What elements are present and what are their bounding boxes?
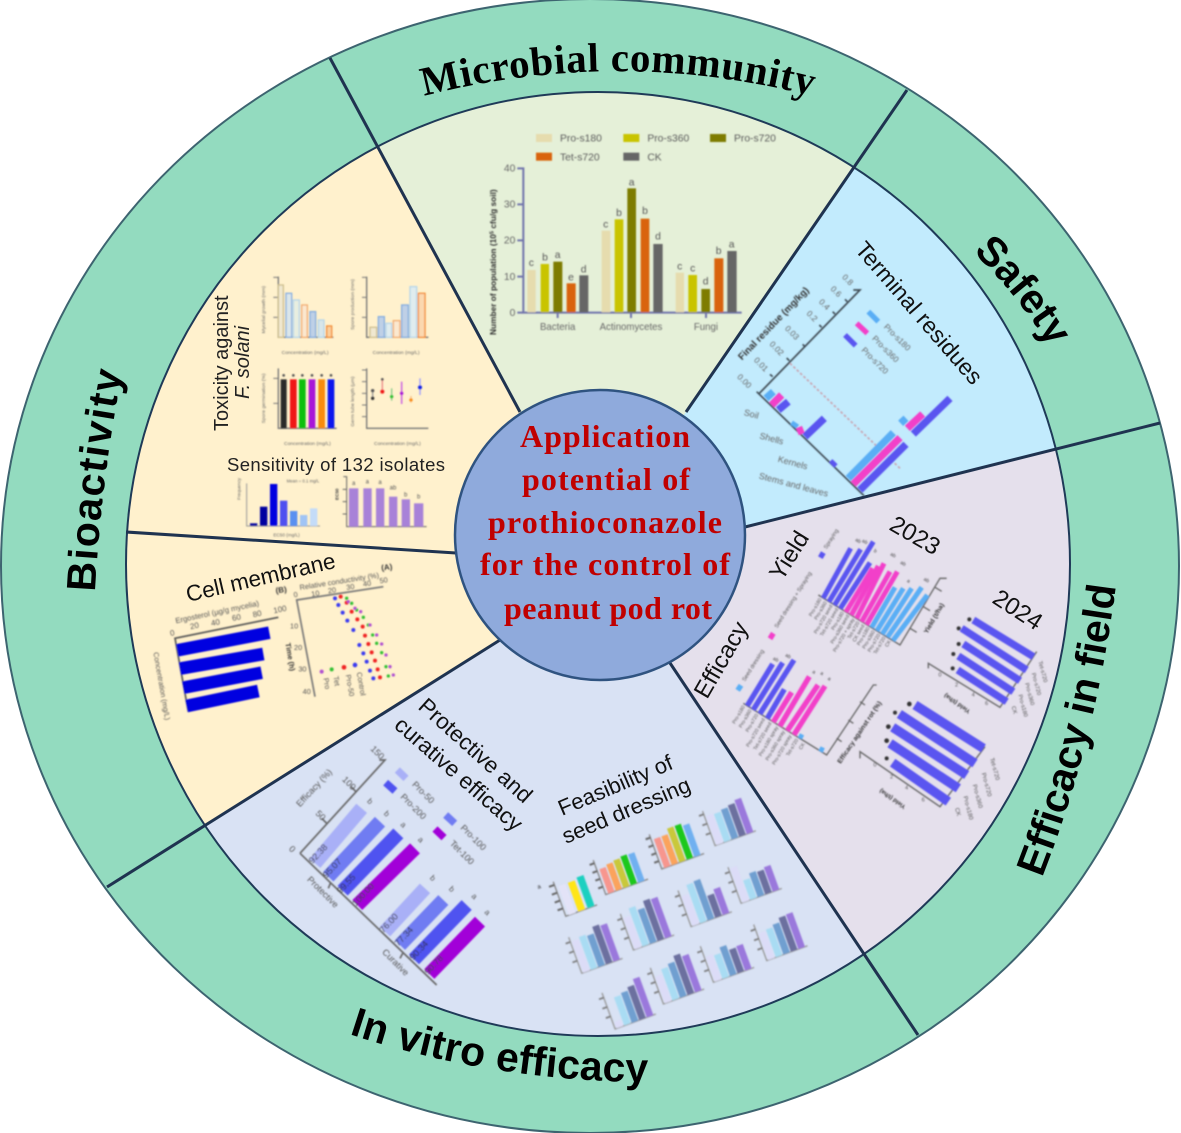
bar chart: yield 2024: 0: [938, 673, 941, 679]
mini chart 1: [537, 868, 597, 922]
bar chart: mycelial growth: [261, 277, 333, 356]
heading: In vitro efficacy: In vitro efficacy: [352, 1008, 648, 1090]
charts: seed dressing small multiples: [537, 796, 807, 1031]
bar chart: protective and curative efficacy: b: [428, 873, 438, 883]
bar chart: protective and curative efficacy: 90.78: [422, 953, 445, 976]
center title: [480, 418, 730, 626]
bar chart: terminal residues: 0.4: [817, 297, 832, 312]
bar chart: protective and curative efficacy: 0: [287, 844, 298, 854]
bar chart: protective and curative efficacy: 150: [369, 744, 386, 761]
legend: seed and spray treatments: Seed dressing: [742, 649, 766, 683]
bar chart: yield 2023: Pro-s360 seed: [830, 614, 851, 645]
bar chart: efficacy 2024: Yield (t/ha): [879, 787, 907, 809]
bar chart: yield 2024: [928, 617, 1048, 718]
bar chart: ergosterol: 20: [189, 621, 200, 631]
bar chart: protective and curative efficacy: 100: [340, 774, 358, 792]
bars: light blue series: [766, 392, 906, 478]
mini chart 9: [696, 931, 754, 984]
bar chart: protective and curative efficacy: Curative: [380, 947, 411, 978]
text: Feasibility of seed dressing: Feasibility of: [554, 749, 677, 821]
bar chart: protective and curative efficacy: Tet-100: [448, 838, 476, 867]
bar chart: yield 2023: a: [906, 578, 911, 585]
bar chart: efficacy 2024: Tet-s720: [988, 757, 1000, 782]
center title: potential of: [522, 461, 690, 497]
bar chart: microbial population: Number of population (10: [488, 234, 498, 335]
bar chart: microbial population: b: [642, 206, 648, 217]
bar chart: yield 2023: b: [872, 548, 878, 555]
bar chart: efficacy 2024: Pro-s180: [961, 796, 974, 821]
bar chart: isolate means: [334, 477, 427, 527]
bar chart: yield 2023: Pro-s360: [861, 629, 877, 650]
bar chart: microbial population: c: [603, 219, 608, 230]
bar chart: ergosterol: 100: [273, 604, 288, 615]
bar chart: terminal residues: Stems and leaves: [758, 471, 830, 499]
bar chart: yield 2023: Tet-s720: [847, 620, 862, 640]
bar chart: protective and curative efficacy: a: [483, 908, 492, 918]
bar chart: microbial population: 10: [504, 272, 516, 283]
scatter chart: relative conductivity: Pro-50: [344, 674, 356, 697]
chart legend: Pro-s180: [560, 133, 602, 144]
bar chart: terminal residues: 0.03: [783, 323, 802, 342]
heading: Efficacy in field: Efficacy in field: [1016, 584, 1116, 876]
bar chart: protective and curative efficacy: b: [447, 884, 457, 894]
bar chart: isolate distribution: Mean = 0.1 mg/L: [287, 479, 320, 484]
mini chart 12: [596, 976, 656, 1031]
center circle: [455, 390, 745, 680]
bar chart: ergosterol: 80: [252, 609, 263, 619]
mini chart 7: [614, 895, 674, 952]
bar chart: microbial population: cfu/g soil): [488, 189, 498, 231]
bar chart: microbial population: d: [581, 265, 587, 276]
scatter chart: relative conductivity: Pro: [321, 677, 332, 690]
bar chart: spore production: [350, 277, 428, 356]
panel: microbial community sector: [377, 92, 853, 535]
bar chart: yield 2023: ab: [889, 552, 897, 560]
scatter chart: relative conductivity: 30: [298, 665, 306, 674]
heading: Bioactivity: Bioactivity: [66, 368, 128, 590]
bar chart: efficacy 2024: 6: [922, 798, 925, 804]
text: Cell membrane: Cell membrane: [184, 548, 338, 607]
bar chart: protective and curative efficacy: a: [416, 835, 426, 845]
bar chart: protective and curative efficacy: Pro-200: [399, 792, 428, 821]
bar chart: yield 2023: ab: [922, 577, 930, 585]
bar chart: microbial population: d: [655, 231, 661, 242]
bar chart: microbial population: Bacteria: [540, 322, 576, 333]
bar chart: isolate means: b: [404, 493, 408, 499]
bar chart: spore germination: Spore germination (%): [261, 373, 267, 423]
bar chart: yield 2024: 6: [985, 701, 988, 707]
mini chart 3: [645, 819, 704, 871]
scatter chart: germ tube length: [350, 368, 428, 447]
bar chart: efficacy 2023: Efficacy against rot (%): [837, 700, 883, 765]
bar chart: isolate distribution: [237, 477, 320, 538]
bar chart: microbial population: a: [555, 250, 561, 261]
bar chart: yield 2023: Pro-s180: [830, 611, 846, 632]
mini chart 1: a: [537, 884, 543, 891]
bar chart: efficacy 2023: Tet-s720 seed: [753, 721, 774, 751]
chart legend: [536, 133, 776, 164]
bar chart: yield 2023: Pro-s180: [808, 597, 824, 618]
bar chart: efficacy 2023: Tet-s720: [785, 738, 800, 758]
bar chart: yield 2024: CK: [1010, 706, 1018, 715]
bar chart: efficacy 2023: Pro-s360 spray: [765, 729, 787, 762]
text: Terminal residues: Terminal residues: [850, 236, 988, 389]
scatter chart: relative conductivity: Time (h): [283, 642, 297, 672]
bar chart: efficacy 2023: Pro-s720 spray: [771, 734, 794, 766]
bar chart: yield 2023: Yield (t/ha): [923, 602, 946, 635]
mini chart 6: [672, 873, 732, 928]
bars: blue series: [778, 398, 950, 490]
chart legend: Pro-s720: [734, 133, 776, 144]
bar chart: yield 2024: Pro-s720: [1030, 672, 1041, 696]
scatter chart: relative conductivity: (A): [381, 562, 393, 573]
bar chart: spore germination: Concentration (mg/L): [284, 441, 331, 447]
scatter chart: relative conductivity: Control: [355, 671, 368, 697]
scatter chart: relative conductivity: 10: [311, 588, 320, 599]
bar chart: ergosterol: Concentration (mg/L): [151, 651, 172, 721]
text: Efficacy: Efficacy: [689, 617, 754, 703]
scatter chart: relative conductivity: Tet: [331, 675, 342, 687]
panel: safety sector: [600, 168, 1056, 535]
bar chart: yield 2023: Pro-s360: [813, 600, 829, 621]
bar chart: efficacy 2023: Pro-s180 spray: [758, 725, 780, 758]
text: Toxicity against F. solani: F. solani: [232, 325, 254, 399]
bar chart: protective and curative efficacy: 77.34: [392, 925, 415, 948]
bar chart: yield 2023: [808, 537, 947, 656]
mini chart 2: [589, 845, 648, 896]
mini chart 10: [749, 910, 807, 962]
bar chart: microbial population: c: [677, 261, 682, 272]
bar chart: yield 2024: 4: [972, 693, 975, 699]
bar chart: terminal residues: Kernels: [777, 454, 809, 472]
mini chart 8: [563, 921, 622, 975]
scatter chart: relative conductivity: 0: [293, 590, 298, 599]
bar chart: isolate means: a: [366, 479, 370, 485]
bar chart: protective and curative efficacy: a: [470, 892, 479, 902]
text: Toxicity against F. solani: Toxicity against: [211, 295, 233, 431]
legend: seed and spray treatments: Seed dressing + Spraying: [774, 571, 813, 629]
bar chart: efficacy 2024: 2: [890, 774, 893, 780]
bar chart: ergosterol: [151, 599, 288, 721]
scatter chart: relative conductivity: Relative conductivity (%): [299, 571, 380, 592]
bar chart: microbial population: 30: [504, 200, 516, 211]
chart legend: CK: [647, 153, 662, 164]
chart legend: [845, 312, 878, 346]
center title: Application: [520, 418, 690, 454]
scatter chart: germ tube length: Concentration (mg/L): [374, 441, 421, 447]
bar chart: efficacy 2024: CK: [953, 807, 961, 817]
charts: field yield and efficacy: [731, 528, 1048, 821]
bar chart: yield 2024: Pro-s180: [1016, 694, 1028, 718]
bar chart: efficacy 2023: a: [819, 671, 825, 677]
bar chart: yield 2023: Tet-s720 seed: [819, 607, 840, 637]
bar chart: efficacy 2024: Pro-s360: [971, 784, 983, 810]
bar chart: protective and curative efficacy: Pro-100: [459, 823, 488, 852]
bar chart: protective and curative efficacy: a: [399, 820, 408, 830]
bar chart: yield 2024: Tet-s720: [1036, 661, 1048, 683]
bar chart: terminal residues: 0.02: [768, 339, 786, 358]
bar chart: efficacy 2023: a: [826, 676, 832, 683]
bar chart: efficacy 2023: [731, 653, 883, 766]
scatter chart: relative conductivity: 30: [346, 582, 355, 592]
bar chart: protective and curative efficacy: 92.38: [307, 842, 329, 865]
center title: peanut pod rot: [504, 590, 712, 626]
bar chart: efficacy 2023: CK: [798, 741, 807, 751]
bar chart: terminal residues: 0.8: [840, 272, 856, 288]
bar chart: terminal residues: 0.6: [829, 284, 844, 299]
text: 2024: 2024: [988, 584, 1047, 636]
bar chart: microbial population: Actinomycetes: [600, 322, 663, 333]
bar chart: efficacy 2024: 4: [905, 785, 908, 791]
charts: cell membrane ergosterol and conductivity: [151, 562, 395, 721]
bar chart: isolate distribution: EC50 (mg/L): [273, 533, 300, 538]
chart legend: Tet-s720: [560, 153, 600, 164]
bar chart: efficacy 2023: ab: [772, 656, 780, 664]
bar chart: protective and curative efficacy: 100.00: [350, 881, 376, 908]
bar chart: yield 2023: CK seed: [852, 623, 867, 643]
scatter chart: relative conductivity: 20: [327, 585, 337, 595]
mini chart 4: [698, 796, 756, 847]
bar chart: protective and curative efficacy: Pro-50: [410, 779, 436, 805]
scatter chart: relative conductivity: 40: [362, 578, 372, 589]
scatter chart: relative conductivity: (B): [275, 585, 288, 595]
bar chart: mycelial growth: Concentration (mg/L): [282, 350, 329, 356]
bar chart: efficacy 2024: 0: [873, 763, 876, 769]
mini chart 11: [644, 950, 704, 1006]
bar chart: microbial population: c: [690, 263, 695, 274]
bar chart: efficacy 2023: Pro-s360: [738, 708, 754, 729]
charts: toxicity and sensitivity: [237, 277, 428, 538]
scatter chart: relative conductivity: [275, 562, 395, 697]
bar chart: isolate means: b: [417, 494, 421, 500]
center title: for the control of: [480, 546, 730, 582]
bar chart: microbial population: [488, 133, 776, 335]
scatter chart: germ tube length: Germ tube length (µm): [350, 376, 356, 427]
bar chart: terminal residues: 0.2: [805, 308, 820, 324]
bar chart: ergosterol: Ergosterol (µg/g mycelia): [175, 599, 260, 625]
bar chart: terminal residues: Pro-s180: [882, 322, 913, 353]
bar chart: isolate means: EC50: [334, 488, 339, 500]
text: Feasibility of seed dressing: seed dressing: [558, 772, 694, 849]
bar chart: microbial population: b: [542, 253, 548, 264]
bar chart: ergosterol: 0: [169, 628, 176, 638]
bar chart: yield 2023: Pro-s180: [856, 626, 872, 647]
center title: prothioconazole: [488, 504, 722, 540]
bar chart: protective and curative efficacy: b: [365, 797, 375, 807]
bar chart: microbial population: a: [729, 239, 735, 250]
bars: pink series: [772, 395, 923, 484]
bar chart: efficacy 2023: Pro-s180: [731, 704, 747, 725]
text: 2023: 2023: [885, 511, 945, 561]
bar chart: protective and curative efficacy: 90.34: [407, 939, 430, 962]
bar chart: terminal residues: Pro-s360: [870, 333, 901, 365]
bar chart: microbial population: c: [529, 258, 534, 269]
bar chart: efficacy 2023: a: [811, 669, 817, 676]
bar chart: isolate distribution: Frequency: [237, 477, 242, 500]
bar chart: yield 2024: 2: [955, 683, 958, 689]
bar chart: efficacy 2023: Pro-s720: [745, 713, 760, 734]
bar chart: microbial population: Fungi: [694, 322, 718, 333]
chart legend: Pro-s360: [647, 133, 689, 144]
text: Toxicity against F. solani: [211, 295, 254, 431]
bar chart: terminal residues: Final residue (mg/kg): [736, 285, 812, 363]
bar chart: efficacy 2023: ab: [784, 653, 792, 661]
bar chart: spore germination: [261, 368, 337, 447]
bar chart: microbial population: 5: [489, 231, 495, 234]
text: Protective and curative efficacy: curative efficacy: [390, 712, 528, 837]
scatter chart: relative conductivity: 20: [294, 643, 302, 652]
bar chart: yield 2023: ab: [861, 538, 869, 546]
bar chart: microbial population: 20: [504, 236, 516, 247]
bar chart: yield 2023: ab: [899, 560, 907, 568]
bar chart: efficacy 2024: [860, 702, 1000, 821]
bar chart: protective and curative efficacy: [287, 744, 492, 985]
bar chart: isolate means: ab: [390, 485, 397, 491]
bar chart: protective and curative efficacy: 95.07: [321, 856, 343, 880]
bar chart: microbial population: e: [568, 273, 574, 284]
bar chart: terminal residues: Pro-s720: [860, 345, 891, 376]
scatter chart: relative conductivity: 10: [290, 621, 298, 630]
heading: Microbial community: Microbial community: [418, 43, 816, 101]
bar chart: protective and curative efficacy: 76.00: [377, 911, 400, 935]
bar chart: yield 2023: CK: [884, 639, 893, 648]
bar chart: yield 2023: Pro-s720 seed: [813, 604, 835, 635]
bar chart: protective and curative efficacy: Protective: [305, 874, 341, 910]
bar chart: protective and curative efficacy: 50: [314, 808, 328, 822]
bar chart: yield 2023: Pro-s720 + spray: [832, 617, 857, 653]
bar chart: yield 2023: Tet-s720: [873, 636, 888, 656]
bar chart: terminal residues: Shells: [758, 431, 785, 447]
bar chart: efficacy 2023: Pro-s720 seed: [745, 717, 767, 748]
mini chart 5: [723, 852, 782, 905]
scatter chart: relative conductivity: 40: [303, 687, 311, 696]
heading: Safety: Safety: [978, 236, 1068, 342]
bar chart: ergosterol: 60: [231, 612, 242, 623]
bar chart: ergosterol: 40: [210, 617, 221, 628]
chart legend: [386, 770, 455, 838]
bar chart: microbial population: 40: [504, 164, 516, 175]
bar chart: protective and curative efficacy: Efficacy (%): [294, 767, 334, 809]
bar chart: microbial population: b: [716, 246, 722, 257]
bar chart: yield 2023: Pro-s720: [867, 633, 882, 654]
text: Yield: Yield: [764, 526, 815, 585]
bar chart: isolate means: a: [352, 481, 356, 487]
bar chart: spore production: Concentration (mg/L): [373, 350, 420, 356]
bar chart: microbial population: d: [703, 277, 709, 288]
legend: seed and spray treatments: Spraying: [823, 528, 840, 550]
text: Sensitivity of 132 isolates: Sensitivity of 132 isolates: [227, 454, 445, 475]
bar chart: terminal residues: Soil: [743, 407, 760, 421]
bar chart: microbial population: b: [616, 208, 622, 219]
bar chart: yield 2024: Yield (t/ha): [943, 692, 972, 714]
bar chart: spore production: Spore production (mm): [350, 279, 356, 330]
bar chart: terminal residues: 0.00: [735, 372, 754, 390]
bar chart: efficacy 2024: Pro-s720: [980, 772, 992, 798]
bar chart: terminal residues: [735, 272, 950, 499]
panel: in vitro efficacy sector: [205, 535, 864, 1036]
bar chart: microbial population: 0: [510, 308, 516, 319]
panel: bioactivity sector: [126, 146, 600, 825]
bar chart: microbial population: a: [629, 177, 635, 188]
bar chart: mycelial growth: Mycelial growth (mm): [261, 286, 267, 333]
bar chart: protective and curative efficacy: b: [382, 809, 392, 819]
legend: seed and spray treatments: [738, 528, 840, 690]
bar chart: yield 2024: Pro-s360: [1023, 682, 1035, 706]
bar chart: protective and curative efficacy: 99.55: [335, 872, 357, 895]
panel: efficacy in field sector: [600, 449, 1070, 954]
bar chart: isolate means: a: [378, 480, 382, 486]
text: Protective and curative efficacy: Protective and: [414, 693, 537, 808]
scatter chart: relative conductivity: 50: [379, 575, 388, 585]
bar chart: terminal residues: 0.01: [752, 355, 771, 374]
bar chart: yield 2023: ab: [854, 537, 862, 545]
